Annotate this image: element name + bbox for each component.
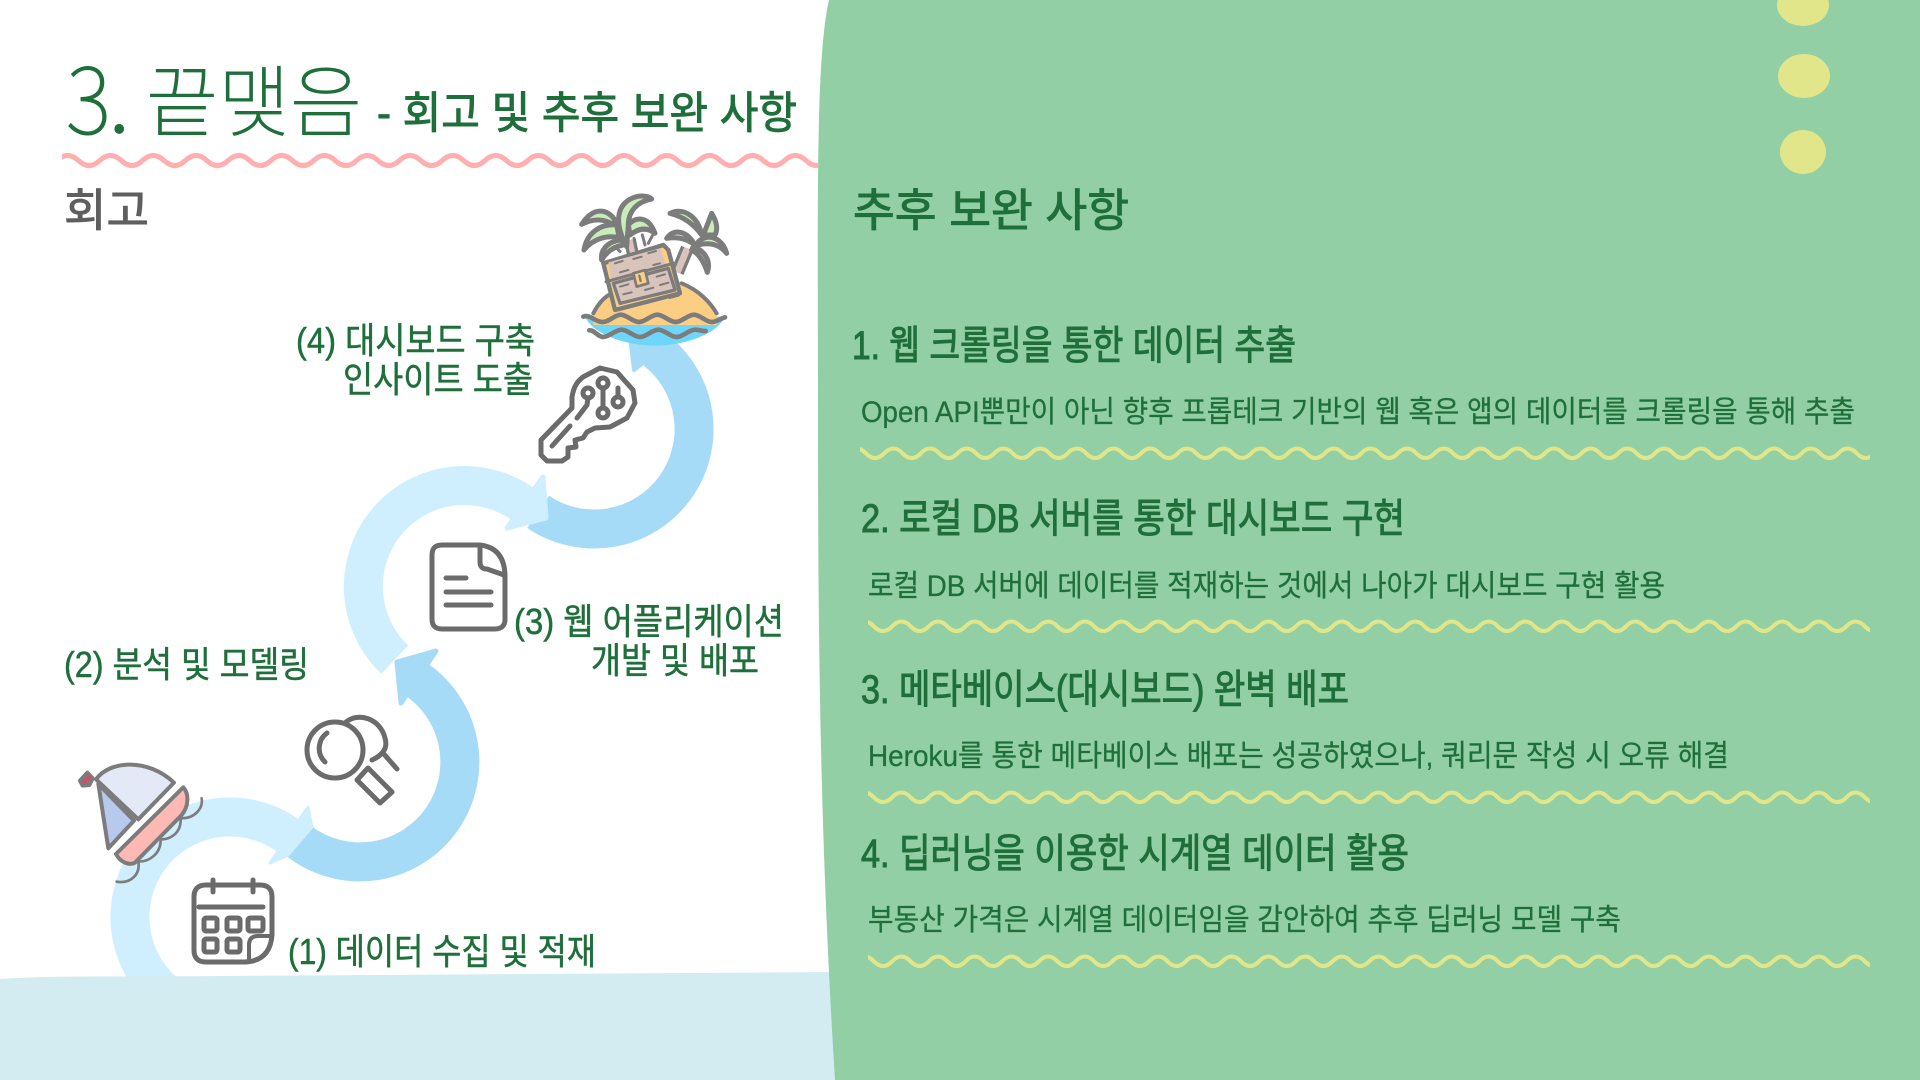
step label 3: 개발 및 배포 [591,640,759,681]
item 4: 4. 딥러닝을 이용한 시계열 데이터 활용 [861,832,1409,876]
item 1: Open API뿐만이 아닌 향후 프롭테크 기반의 웹 혹은 앱의 데이터를 크롤링을 통해 추출 [861,396,1855,429]
title [66,29,362,161]
step label 4 [296,320,535,400]
heading: future improvements: 추후 보완 사항 [853,185,1129,236]
growth path arrows [130,335,694,1003]
icon: magnifying glasses [307,717,397,803]
item 2: 2. 로컬 DB 서버를 통한 대시보드 구현 [861,497,1405,541]
arrow 1: light blue arc [130,817,294,1003]
bottom pale water band [0,972,840,1080]
right green panel background [818,0,1920,1080]
title: . [110,58,128,154]
item 3: 3. 메타베이스(대시보드) 완벽 배포 [861,668,1349,712]
icon: document [432,545,505,629]
palm leaves [582,196,727,272]
arrowhead 2 [397,651,436,703]
item 3 [856,668,1883,802]
icon: sailboat [80,765,202,882]
item 3: Heroku를 통한 메타베이스 배포는 성공하였으나, 쿼리문 작성 시 오류 해결 [868,740,1729,773]
arrowhead 1 [270,807,312,863]
heading: retrospective: 회고 [64,185,149,236]
arrowhead 4 [630,335,680,370]
pink wavy divider [57,156,827,166]
sparkle behind chest [607,235,660,257]
step label 3: (3) 웹 어플리케이션 [514,601,784,642]
item 2: 로컬 DB 서버에 데이터를 적재하는 것에서 나아가 대시보드 구현 활용 [868,570,1665,603]
item 1: 1. 웹 크롤링을 통한 데이터 추출 [852,324,1296,368]
waves [583,315,725,322]
step label 4: (4) 대시보드 구축 [296,320,535,361]
icon: treasure island [582,196,727,346]
treasure chest [603,245,680,310]
icon: circuit key [541,368,635,461]
icon: calendar [194,880,272,962]
water [585,317,725,346]
step label 1: (1) 데이터 수집 및 적재 [288,931,596,972]
step label 3 [514,601,784,681]
arrowhead 3 [507,477,546,528]
item 1 [848,324,1875,458]
step label 2: (2) 분석 및 모델링 [64,644,309,685]
item 2 [856,497,1883,631]
subtitle: - 회고 및 추후 보완 사항 [377,89,797,138]
item 4: 부동산 가격은 시계열 데이터임을 감안하여 추후 딥러닝 모델 구축 [868,904,1621,937]
title: 끝맺음 [146,41,362,153]
title: 3 [66,29,111,161]
arrow 4: dark blue arc to island [538,350,694,529]
arrow 3: light blue arc [363,485,527,660]
palm trunks [677,248,687,272]
arrow 2: dark blue arc [298,677,460,862]
step label 4: 인사이트 도출 [343,359,533,400]
sand mound [593,282,717,325]
decorative yellow dots [1777,0,1830,174]
item 4 [856,832,1883,966]
